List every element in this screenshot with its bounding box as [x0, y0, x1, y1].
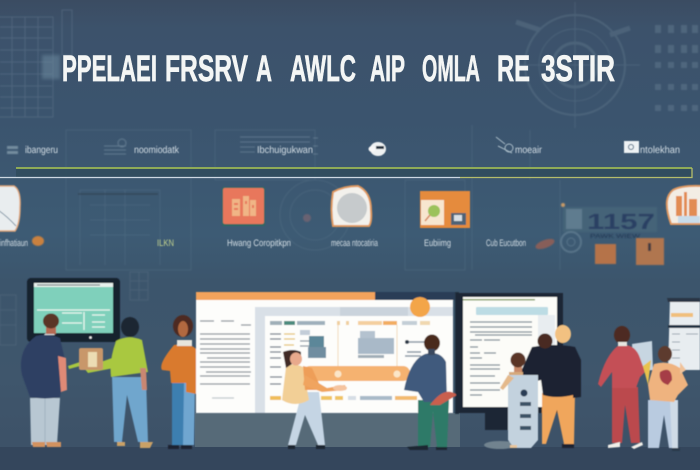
title	[62, 48, 615, 89]
icon: ring arrow	[496, 137, 513, 153]
title: AWLC	[290, 48, 356, 89]
background pattern: mid-band technical lines	[66, 125, 560, 270]
text column	[200, 321, 251, 398]
orange squares right	[561, 203, 664, 265]
gear outline	[561, 232, 581, 252]
title: PPELAEI	[62, 48, 157, 89]
person 8 tan top with tablet	[643, 346, 688, 451]
icon: right oval badge	[667, 186, 700, 224]
bottom label row: mecaa ntocatiria	[331, 238, 378, 249]
background pattern: dot matrix top right	[655, 25, 698, 111]
data panel right: PAWK WIEW	[590, 233, 640, 240]
tablet right edge	[667, 298, 700, 370]
top label row: moeair	[515, 145, 543, 156]
inner panel frame	[255, 307, 453, 413]
title: OMLA	[422, 48, 480, 89]
bottom label row	[0, 238, 526, 249]
light page held	[632, 341, 653, 372]
icon: coral building card	[222, 187, 265, 226]
person 7 red tracksuit	[598, 326, 645, 449]
title: 3STIR	[541, 48, 615, 89]
small rose dot	[303, 214, 311, 222]
icon: white camera square	[624, 141, 639, 153]
top label row: ntolekhan	[640, 145, 680, 156]
title: RE	[497, 48, 530, 89]
screen edge dark	[455, 292, 459, 414]
top label row: noomiodatk	[134, 145, 180, 156]
yellow timeline line	[460, 168, 692, 178]
icon: left oval badge	[0, 186, 20, 231]
lower background grids	[0, 272, 148, 345]
data panel right: 1157	[587, 209, 655, 234]
icon: chart glyph	[104, 139, 126, 154]
dark shadow under green line	[16, 169, 692, 177]
person 2 green shirt with box	[68, 317, 153, 448]
white timeline line	[0, 176, 460, 178]
background band: dark rule	[78, 193, 158, 195]
background pattern: grid panel top left	[0, 10, 72, 117]
title: FRSRV	[165, 48, 248, 89]
bottom label row: ILKN	[157, 238, 174, 249]
person 1 navy shirt	[21, 314, 67, 447]
orange blob left	[32, 236, 44, 246]
person 6 black jacket with child	[500, 325, 581, 448]
top label row	[25, 145, 680, 156]
monitor left	[27, 278, 120, 342]
title: A	[256, 48, 272, 89]
lower wall band	[195, 413, 460, 447]
top label row: Ibchuigukwan	[257, 145, 313, 156]
icon: document stack	[240, 137, 318, 154]
title: AIP	[370, 48, 405, 89]
top label row: ibangeru	[25, 145, 58, 156]
background pattern: dial top right	[512, 2, 640, 128]
screen header bar	[196, 292, 375, 300]
main screen	[196, 292, 459, 414]
bottom label row: Cub Eucutbon	[486, 238, 526, 249]
person 5 back view with green trousers	[404, 334, 457, 450]
bottom label row: Hwang Coropitkpn	[227, 238, 291, 249]
person 4 woman pointing	[282, 350, 347, 449]
bottom label row: Eubiimg	[424, 238, 451, 249]
data panel right	[563, 207, 657, 240]
bottom label row: infhatiaun	[0, 238, 28, 249]
tablet center right	[456, 293, 563, 449]
icon: cloud mask	[368, 142, 386, 156]
orange blob right	[534, 237, 556, 251]
screen header dark	[375, 292, 455, 300]
icon: center oval badge	[332, 186, 371, 226]
dashboard tabs	[270, 321, 430, 325]
green timeline line	[16, 167, 692, 169]
person 3 orange sweater	[161, 315, 202, 449]
background band: left haze behind title	[42, 55, 60, 79]
icon: small server	[7, 146, 18, 154]
dashboard content	[270, 325, 425, 400]
orange sun	[410, 297, 430, 317]
icon: orange folder card	[420, 191, 470, 228]
